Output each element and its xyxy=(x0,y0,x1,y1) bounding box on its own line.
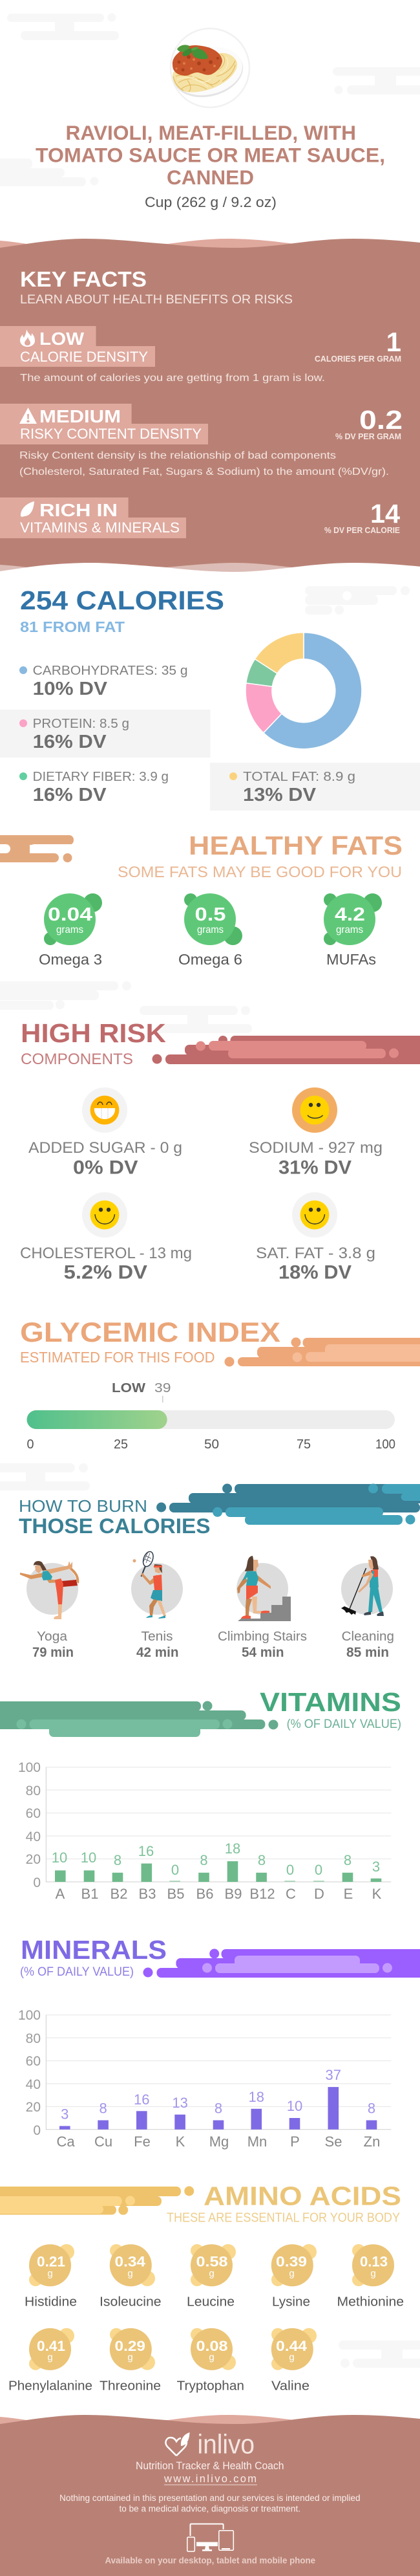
fact: rich in vitamins and minerals xyxy=(0,497,400,538)
panel: vitamins xyxy=(0,1687,401,1902)
activity: yoga xyxy=(20,1561,79,1660)
bar chart: minerals: Zn xyxy=(364,2134,380,2150)
macro: total fat xyxy=(210,763,420,811)
bar chart: vitamins: 0 xyxy=(171,1862,179,1878)
gauge: score label: 39 xyxy=(154,1381,171,1395)
bar chart: vitamins: 80 xyxy=(26,1784,41,1798)
bar chart: minerals: Fe xyxy=(134,2134,151,2150)
bar chart: minerals: 37 xyxy=(326,2067,341,2083)
amino: valine: g xyxy=(289,2352,295,2363)
activity: climbing stairs: Climbing Stairs xyxy=(218,1630,307,1644)
bar chart: minerals: 18 xyxy=(249,2089,264,2105)
label: low: LOW xyxy=(39,329,85,349)
bar chart: vitamins: 20 xyxy=(26,1852,41,1867)
gauge: score label: LOW xyxy=(112,1381,145,1395)
macro: protein: 16% DV xyxy=(33,732,107,752)
gauge: bar xyxy=(27,1410,395,1429)
icon: devices xyxy=(187,2524,233,2551)
activity: cleaning: Cleaning xyxy=(342,1630,394,1644)
panel: amino acids xyxy=(0,2181,404,2394)
icon: leaf xyxy=(21,501,34,517)
macro: protein: PROTEIN: 8.5 g xyxy=(33,716,129,731)
amino: lysine xyxy=(271,2244,317,2309)
activity: tennis: 42 min xyxy=(136,1645,178,1660)
unit: calories per gram: CALORIES PER GRAM xyxy=(315,354,401,364)
bar chart: minerals: K xyxy=(176,2134,185,2150)
label: calorie density: CALORIE DENSITY xyxy=(20,349,148,365)
subheading: 81 from fat: 81 FROM FAT xyxy=(20,618,125,635)
amino: phenylalanine: 0.41 xyxy=(37,2338,65,2354)
bar chart: vitamins: 8 xyxy=(200,1852,208,1868)
amino: histidine xyxy=(25,2244,77,2309)
badge: mufas: 4.2 xyxy=(335,904,365,925)
bar chart: vitamins xyxy=(18,1760,391,1902)
bar chart: minerals: 16 xyxy=(134,2091,150,2108)
heading: healthy fats: HEALTHY FATS xyxy=(189,831,403,860)
item: saturated fat: SAT. FAT - 3.8 g xyxy=(256,1245,375,1262)
bar chart: minerals: Mn xyxy=(247,2134,267,2150)
amino: leucine: Leucine xyxy=(187,2295,235,2309)
heading: glycemic index: GLYCEMIC INDEX xyxy=(20,1317,280,1348)
item: added sugar: 0% DV xyxy=(73,1157,138,1179)
amino: tryptophan: Tryptophan xyxy=(177,2379,244,2394)
bar chart: vitamins: 60 xyxy=(26,1806,41,1821)
bar chart: vitamins: D xyxy=(314,1886,324,1902)
activity: climbing stairs: 54 min xyxy=(242,1645,284,1660)
decoration: orange bars xyxy=(225,1338,420,1366)
activity: tennis xyxy=(131,1550,183,1660)
macro: carbohydrates: 10% DV xyxy=(33,679,108,699)
heading: vitamins: VITAMINS xyxy=(260,1687,401,1717)
amino: lysine: g xyxy=(289,2268,295,2279)
bar chart: vitamins: K xyxy=(372,1886,382,1902)
gauge: scale: 0 xyxy=(27,1437,34,1452)
item: cholesterol xyxy=(20,1192,192,1283)
unit: % dv per gram: % DV PER GRAM xyxy=(335,431,401,441)
bar chart: minerals: 8 xyxy=(99,2101,107,2117)
decoration: teal bars xyxy=(156,1484,420,1525)
item: added sugar xyxy=(28,1087,182,1179)
badge: omega 6: Omega 6 xyxy=(178,951,242,968)
bar chart: minerals: 100 xyxy=(18,2008,41,2023)
bar chart: vitamins: 8 xyxy=(344,1852,352,1868)
badge: omega 6 xyxy=(178,893,242,968)
tagline: Nutrition Tracker & Health Coach xyxy=(136,2460,284,2472)
decoration: yellow bars xyxy=(0,2187,194,2215)
amino: phenylalanine xyxy=(8,2328,92,2394)
value: 14: 14 xyxy=(370,499,400,529)
item: sodium: SODIUM - 927 mg xyxy=(249,1139,383,1157)
activity: tennis: Tenis xyxy=(141,1630,173,1644)
amino: leucine: 0.58 xyxy=(196,2254,227,2270)
bar chart: vitamins: B2 xyxy=(110,1886,127,1902)
heading: 254 calories: 254 CALORIES xyxy=(20,585,224,615)
decoration: orange bars xyxy=(0,835,75,862)
macro: dietary fiber: DIETARY FIBER: 3.9 g xyxy=(33,769,169,784)
title: TOMATO SAUCE OR MEAT SAUCE, xyxy=(36,144,385,167)
label: rich in: RICH IN xyxy=(39,500,118,520)
description: The amount of calories you are getting from 1 gram is low. xyxy=(20,373,325,384)
bar chart: vitamins: E xyxy=(344,1886,353,1902)
serving size: Cup (262 g / 9.2 oz) xyxy=(145,194,277,210)
gauge: scale: 25 xyxy=(114,1437,128,1452)
amino: isoleucine xyxy=(100,2244,162,2309)
label: medium: MEDIUM xyxy=(39,406,121,426)
macro: carbohydrates xyxy=(19,663,188,699)
value: 1: 1 xyxy=(386,327,401,357)
gauge: scale xyxy=(27,1437,395,1452)
decoration: red bars xyxy=(152,1036,420,1064)
gauge: scale: 50 xyxy=(204,1437,219,1452)
disclaimer: to be a medical advice, diagnosis or treatment. xyxy=(119,2504,300,2514)
amino: methionine: Methionine xyxy=(337,2295,404,2309)
heading: high risk: HIGH RISK xyxy=(21,1018,166,1048)
amino: methionine: 0.13 xyxy=(360,2254,388,2270)
bar chart: minerals: 8 xyxy=(215,2101,222,2117)
bar chart: minerals: Cu xyxy=(94,2134,112,2150)
subheading: ESTIMATED FOR THIS FOOD xyxy=(20,1349,215,1366)
basil leaves xyxy=(177,45,207,59)
amino: tryptophan: 0.08 xyxy=(196,2338,227,2354)
activity: yoga: Yoga xyxy=(37,1630,68,1644)
amino: phenylalanine: g xyxy=(47,2352,53,2363)
badge: omega 3: Omega 3 xyxy=(39,951,102,968)
bar chart: minerals: 20 xyxy=(26,2100,41,2115)
activity: cleaning xyxy=(341,1556,394,1660)
badge: mufas: MUFAs xyxy=(326,951,376,968)
badge: omega 6: grams xyxy=(197,924,224,935)
availability note: Available on your desktop, tablet and mobile phone xyxy=(105,2555,315,2565)
fact: risky content density xyxy=(0,404,403,477)
bar chart: vitamins: C xyxy=(286,1886,296,1902)
label: vitamins and minerals: VITAMINS & MINERALS xyxy=(20,519,180,536)
description xyxy=(19,450,389,477)
bar chart: vitamins: B12 xyxy=(249,1886,275,1902)
bar chart: minerals: 80 xyxy=(26,2031,41,2046)
panel: how to burn those calories xyxy=(19,1484,420,1660)
icon: warning triangle xyxy=(19,408,37,424)
amino: valine: 0.44 xyxy=(276,2338,308,2354)
activity: cleaning: 85 min xyxy=(346,1645,389,1660)
disclaimer xyxy=(59,2493,361,2514)
heading: key facts: KEY FACTS xyxy=(20,267,147,291)
macro: total fat: TOTAL FAT: 8.9 g xyxy=(243,769,355,784)
logo: inlivo xyxy=(166,2429,255,2460)
header: food photo xyxy=(168,28,249,107)
amino: leucine: g xyxy=(209,2268,215,2279)
amino: isoleucine: Isoleucine xyxy=(100,2295,162,2309)
heading: those calories: THOSE CALORIES xyxy=(19,1514,211,1538)
heading: minerals: MINERALS xyxy=(21,1935,167,1965)
amino: lysine: 0.39 xyxy=(276,2254,307,2270)
bar chart: minerals: 13 xyxy=(172,2095,188,2111)
subheading: (% OF DAILY VALUE) xyxy=(20,1965,134,1979)
panel: glycemic index xyxy=(20,1317,420,1452)
subheading: (% OF DAILY VALUE) xyxy=(287,1718,401,1731)
item: cholesterol: 5.2% DV xyxy=(64,1262,147,1283)
badge: omega 3: grams xyxy=(56,924,83,935)
item: sodium xyxy=(249,1087,383,1179)
gauge: scale: 75 xyxy=(297,1437,311,1452)
macro: protein xyxy=(0,710,211,758)
item: saturated fat xyxy=(256,1192,375,1283)
bar chart: minerals: P xyxy=(290,2134,300,2150)
item: cholesterol: CHOLESTEROL - 13 mg xyxy=(20,1245,192,1262)
badge: mufas: grams xyxy=(336,924,363,935)
bar chart: minerals: Ca xyxy=(56,2134,75,2150)
bar chart: vitamins: 40 xyxy=(26,1829,41,1844)
amino: lysine: Lysine xyxy=(272,2295,310,2309)
description: (Cholesterol, Saturated Fat, Sugars & Sodium) to the amount (%DV/gr). xyxy=(19,466,389,477)
bar chart: vitamins: 0 xyxy=(286,1862,294,1878)
fact: calorie density xyxy=(0,326,401,384)
amino: tryptophan: g xyxy=(209,2352,215,2363)
macro: dietary fiber xyxy=(19,769,169,805)
badge: omega 6: 0.5 xyxy=(195,904,226,925)
title: RAVIOLI, MEAT-FILLED, WITH xyxy=(66,121,356,144)
badge: mufas xyxy=(324,893,382,968)
bar chart: vitamins: 0 xyxy=(315,1862,322,1878)
amino: threonine: 0.29 xyxy=(115,2338,145,2354)
amino: valine: Valine xyxy=(271,2379,310,2394)
bar chart: vitamins: B3 xyxy=(139,1886,156,1902)
heading: how to burn: HOW TO BURN xyxy=(19,1496,147,1516)
spaghetti xyxy=(173,53,237,93)
panel: key facts xyxy=(0,239,420,572)
amino: phenylalanine: Phenylalanine xyxy=(8,2379,92,2394)
amino: histidine: g xyxy=(47,2268,53,2279)
bar chart: minerals: 0 xyxy=(33,2123,41,2138)
bar chart: minerals xyxy=(18,2008,391,2150)
macro: dietary fiber: 16% DV xyxy=(33,785,107,805)
subheading: LEARN ABOUT HEALTH BENEFITS OR RISKS xyxy=(20,292,293,307)
bar chart: vitamins: A xyxy=(56,1886,65,1902)
donut chart xyxy=(246,633,362,749)
icon: flame xyxy=(20,329,35,347)
bar chart: vitamins: B9 xyxy=(225,1886,242,1902)
bar chart: minerals: Se xyxy=(325,2134,342,2150)
badge: omega 3 xyxy=(39,893,102,968)
panel: minerals xyxy=(18,1935,420,2150)
logo: inlivo: inlivo xyxy=(198,2429,255,2460)
bar chart: vitamins: 100 xyxy=(18,1760,41,1775)
amino: isoleucine: 0.34 xyxy=(115,2254,146,2270)
bar chart: vitamins: B5 xyxy=(167,1886,184,1902)
amino: histidine: 0.21 xyxy=(37,2254,65,2270)
gauge: score label xyxy=(112,1381,171,1403)
bar chart: vitamins: 0 xyxy=(33,1875,41,1890)
panel: high risk components xyxy=(20,1018,420,1283)
bar chart: vitamins: 16 xyxy=(138,1843,154,1859)
macro: total fat: 13% DV xyxy=(243,785,317,805)
activity: climbing stairs xyxy=(218,1556,307,1660)
amino: leucine xyxy=(187,2244,236,2309)
plate xyxy=(168,41,248,104)
bar chart: vitamins: 18 xyxy=(225,1840,240,1857)
bar chart: vitamins: 8 xyxy=(258,1852,266,1868)
title xyxy=(36,121,385,189)
macro: carbohydrates: CARBOHYDRATES: 35 g xyxy=(33,663,188,678)
bar chart: minerals: 10 xyxy=(287,2098,302,2114)
activity: yoga: 79 min xyxy=(32,1645,74,1660)
bar chart: minerals: Mg xyxy=(209,2134,229,2150)
bar chart: minerals: 8 xyxy=(368,2101,375,2117)
panel: healthy fats xyxy=(0,831,403,968)
bar chart: minerals: 3 xyxy=(61,2106,68,2123)
subheading: components: COMPONENTS xyxy=(21,1051,133,1068)
amino: isoleucine: g xyxy=(127,2268,133,2279)
panel: calories xyxy=(0,585,420,811)
decoration: purple bars xyxy=(143,1948,420,1978)
value: 0.2: 0.2 xyxy=(359,405,403,435)
item: sodium: 31% DV xyxy=(278,1157,352,1179)
description: Risky Content density is the relationship of bad components xyxy=(19,450,336,461)
item: added sugar: ADDED SUGAR - 0 g xyxy=(28,1139,182,1157)
meat sauce xyxy=(173,45,222,76)
bar chart: vitamins: 10 xyxy=(81,1850,96,1866)
decoration: green bars xyxy=(0,1701,278,1737)
amino: methionine: g xyxy=(370,2268,376,2279)
title: CANNED xyxy=(167,166,254,189)
disclaimer: Nothing contained in this presentation and our services is intended or implied xyxy=(59,2493,361,2503)
gauge: scale: 100 xyxy=(375,1437,395,1452)
bar chart: vitamins: 8 xyxy=(114,1852,121,1868)
website link: www.inlivo.com xyxy=(163,2473,257,2485)
amino: tryptophan xyxy=(177,2328,244,2394)
amino: histidine: Histidine xyxy=(25,2295,77,2309)
item: saturated fat: 18% DV xyxy=(278,1262,352,1283)
bar chart: vitamins: B1 xyxy=(81,1886,98,1902)
amino: threonine: g xyxy=(127,2352,133,2363)
bar chart: vitamins: B6 xyxy=(196,1886,213,1902)
badge: omega 3: 0.04 xyxy=(48,904,92,925)
bar chart: vitamins: 3 xyxy=(372,1859,380,1875)
amino: valine xyxy=(271,2328,317,2394)
label: risky content density: RISKY CONTENT DENSITY xyxy=(20,426,202,442)
amino: threonine xyxy=(100,2328,161,2394)
amino: methionine xyxy=(337,2244,404,2309)
bar chart: vitamins: 10 xyxy=(52,1850,67,1866)
panel: footer xyxy=(0,2415,420,2576)
subheading: SOME FATS MAY BE GOOD FOR YOU xyxy=(118,864,402,881)
heading: amino acids: AMINO ACIDS xyxy=(204,2181,401,2210)
bar chart: minerals: 40 xyxy=(26,2077,41,2092)
amino: threonine: Threonine xyxy=(100,2379,161,2394)
unit: % dv per calorie: % DV PER CALORIE xyxy=(324,525,400,535)
photo ring xyxy=(171,28,249,107)
bar chart: minerals: 60 xyxy=(26,2054,41,2069)
